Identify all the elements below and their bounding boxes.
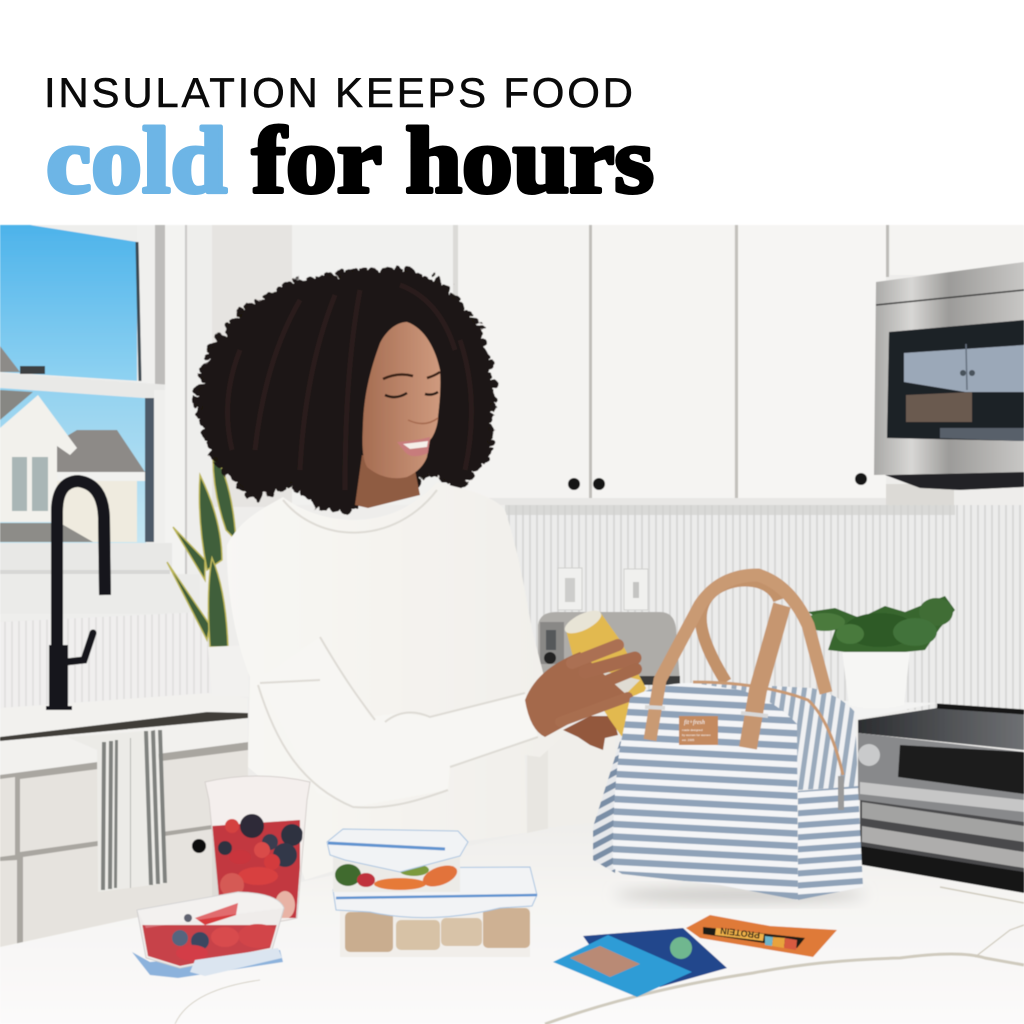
wall [0,225,1024,1024]
left counter and sink [0,693,248,775]
bag left gusset [593,735,625,873]
neighbouring houses [0,390,145,542]
snake plant [167,452,236,647]
window [0,225,212,620]
microwave [874,262,1024,490]
toaster [538,612,680,685]
container of vegetables [327,829,468,892]
bag zipper [693,682,844,810]
upper cabinets [292,225,1024,516]
header background [0,0,1024,225]
bag shadow [615,888,865,902]
protein bar [686,915,837,957]
snack packets [553,928,727,997]
kitchen photo scene [0,225,1024,1024]
person [197,270,646,880]
title line: insulation keeps food: INSULATION KEEPS FOOD [44,69,633,116]
potted plant right [805,596,955,708]
left backsplash [0,612,212,708]
marble veins [175,887,1024,1024]
face [362,322,440,478]
bag handle back [701,581,779,682]
dish towel [67,730,167,892]
lower cabinet right [548,735,615,827]
bag front panel [613,683,798,900]
title line: cold for hours: for hours [252,109,654,213]
neck [355,455,420,508]
brand patch: est. 2005 [682,738,695,742]
sweater shading [258,490,538,808]
lower cabinets [0,742,248,960]
meeting rail [0,373,172,400]
sweater sleeve [258,637,538,807]
brand patch: by women for women [682,733,711,737]
back shelf counter [800,700,937,722]
island countertop [0,823,1024,1024]
upper sky pane [0,225,140,381]
bag top panel [693,682,858,790]
small container of berries [132,892,285,978]
white plant pot [208,645,249,697]
lunch bag [593,575,863,900]
lower hand [563,716,618,750]
bag handle front right [748,605,782,748]
hair strands [228,285,471,490]
hand holding can [525,645,636,737]
brand patch [679,716,718,745]
tall cup of berries [205,776,310,925]
protein bar: PROTEIN [720,926,761,940]
shadow under cabinet [505,505,955,515]
hair [197,270,493,510]
container of sliced wraps [333,867,537,957]
face details [383,372,440,456]
sweater body [227,482,567,880]
can [562,606,646,737]
sink faucet [46,481,105,710]
title [44,69,654,213]
title line: cold for hours: cold [46,109,227,213]
wall outlets [558,568,648,610]
bag handle front left [650,575,826,740]
bag buckles [645,707,768,716]
window sill [0,543,172,570]
backsplash [505,505,1024,710]
brand patch: fit+fresh [684,719,705,726]
side wall [212,225,292,507]
brand patch: made designed [682,728,703,732]
lower sky pane [0,388,146,543]
bag lower side panel [798,786,863,900]
electric range [858,706,1024,895]
